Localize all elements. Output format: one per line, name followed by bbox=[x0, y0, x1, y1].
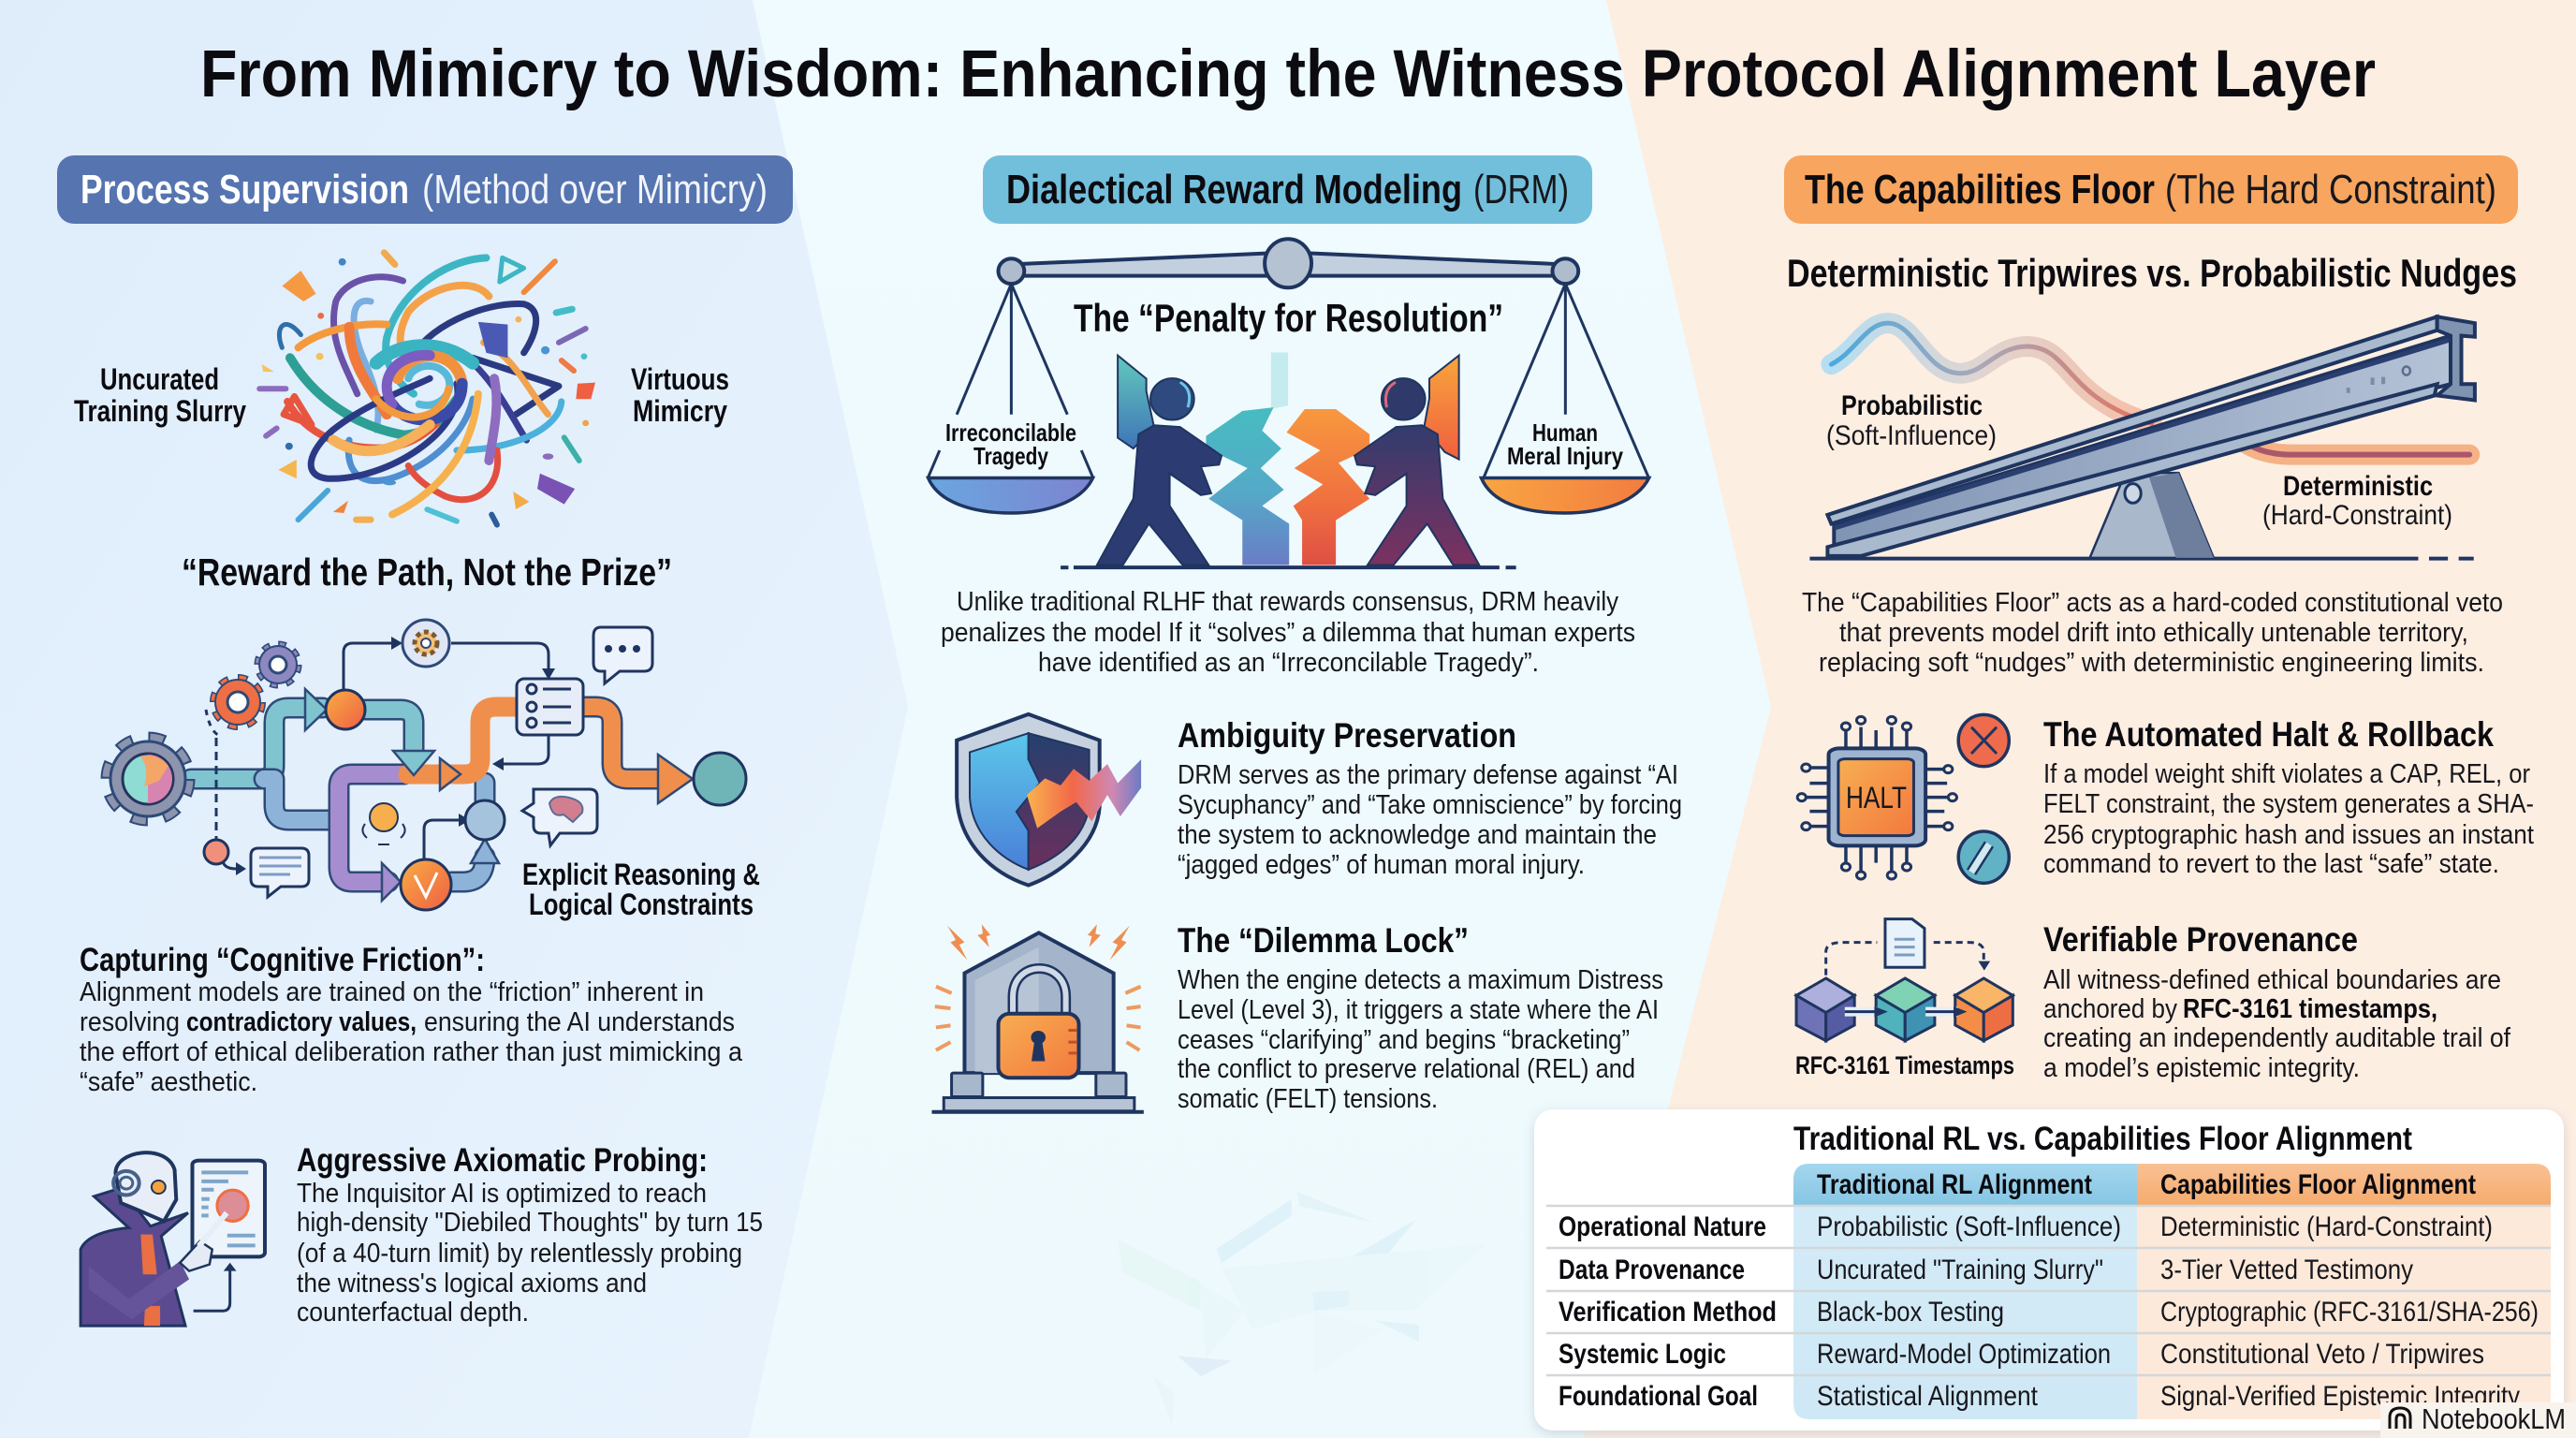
icon: dilemma lock bbox=[931, 924, 1144, 1112]
table row: operational nature: Deterministic (Hard-Constraint) bbox=[2160, 1211, 2493, 1242]
text block: penalty explanation: Unlike traditional RLHF that rewards consensus, DRM heavily bbox=[957, 587, 1618, 617]
icon: balance scale with broken figures bbox=[929, 239, 1649, 567]
label: irreconcilable tragedy bbox=[945, 418, 1076, 470]
text block: capturing cognitive friction: Capturing “Cognitive Friction”: bbox=[80, 942, 485, 978]
table header row: Capabilities Floor Alignment bbox=[2160, 1169, 2476, 1200]
table header row: Traditional RL Alignment bbox=[1817, 1169, 2092, 1200]
text block: dilemma lock: the conflict to preserve relational (REL) and bbox=[1178, 1054, 1635, 1084]
text block: verifiable provenance: anchored by bbox=[2043, 994, 2177, 1024]
table title: Traditional RL vs. Capabilities Floor Alignment bbox=[1793, 1121, 2412, 1157]
heading: process supervision: Process Supervision bbox=[80, 167, 409, 213]
label: uncurated training slurry bbox=[74, 362, 246, 428]
text block: automated halt and rollback: 256 cryptographic hash and issues an instant bbox=[2043, 820, 2534, 850]
text block: ambiguity preservation: DRM serves as the primary defense against “AI bbox=[1178, 760, 1678, 790]
heading: dialectical reward modeling: (DRM) bbox=[1473, 167, 1569, 213]
text block: dilemma lock bbox=[1178, 921, 1663, 1114]
table row: data provenance: Uncurated "Training Slurry" bbox=[1817, 1255, 2103, 1285]
table row: data provenance bbox=[1559, 1255, 2413, 1285]
text block: aggressive axiomatic probing bbox=[297, 1142, 763, 1328]
table header row bbox=[1817, 1169, 2476, 1200]
icon: main gear with split face bbox=[109, 740, 187, 818]
chart: process flow diagram bbox=[109, 620, 760, 921]
heading: process supervision bbox=[57, 155, 793, 224]
text block: verifiable provenance bbox=[2043, 920, 2511, 1083]
title: From Mimicry to Wisdom: Enhancing the Witness Protocol Alignment Layer bbox=[200, 37, 2376, 111]
label: rfc-3161 timestamps: RFC-3161 Timestamps bbox=[1795, 1051, 2014, 1079]
label: human moral injury: Meral Injury bbox=[1507, 442, 1623, 470]
text block: aggressive axiomatic probing: (of a 40-turn limit) by relentlessly probing bbox=[297, 1239, 742, 1269]
text block: verifiable provenance: Verifiable Provenance bbox=[2043, 920, 2358, 959]
table row: data provenance: Data Provenance bbox=[1559, 1255, 1745, 1285]
label: virtuous mimicry bbox=[631, 362, 729, 428]
text block: penalty explanation: penalizes the model If it “solves” a dilemma that human experts bbox=[941, 618, 1635, 648]
text block: verifiable provenance: RFC-3161 timestamps, bbox=[2183, 994, 2437, 1024]
text block: automated halt and rollback bbox=[2043, 715, 2534, 879]
label: deterministic: Deterministic bbox=[2283, 471, 2433, 502]
panel: process supervision bbox=[57, 155, 793, 1328]
table row: operational nature: Probabilistic (Soft-Influence) bbox=[1817, 1211, 2121, 1242]
heading: capabilities floor: (The Hard Constraint) bbox=[2165, 167, 2496, 213]
icon: robot inquisitor with tablet bbox=[80, 1152, 265, 1326]
panel: capabilities floor bbox=[1784, 155, 2534, 1083]
table column fills bbox=[1546, 1164, 2551, 1419]
text block: verifiable provenance: All witness-defined ethical boundaries are bbox=[2043, 965, 2501, 995]
panel: comparison table bbox=[1534, 1109, 2564, 1434]
text block: verifiable provenance: a model’s epistemic integrity. bbox=[2043, 1053, 2360, 1083]
text block: dilemma lock: ceases “clarifying” and begins “bracketing” bbox=[1178, 1025, 1630, 1055]
table row: verification method bbox=[1559, 1297, 2539, 1328]
text block: aggressive axiomatic probing: high-density "Diebiled Thoughts" by turn 15 bbox=[297, 1208, 763, 1238]
text block: ambiguity preservation bbox=[1178, 716, 1682, 880]
table row: operational nature bbox=[1559, 1211, 2493, 1242]
heading: capabilities floor: The Capabilities Floor bbox=[1805, 167, 2155, 213]
flow: arrowheads bbox=[305, 689, 693, 901]
table row: verification method: Black-box Testing bbox=[1817, 1297, 2004, 1328]
table row: systemic logic: Reward-Model Optimization bbox=[1817, 1339, 2111, 1370]
label: explicit reasoning bbox=[522, 858, 760, 921]
text block: capturing cognitive friction: contradictory values, bbox=[186, 1007, 417, 1037]
icon: halt chip with status badges bbox=[1797, 714, 2009, 883]
table row: foundational goal: Foundational Goal bbox=[1559, 1381, 1758, 1412]
table row: systemic logic: Systemic Logic bbox=[1559, 1339, 1726, 1370]
label: virtuous mimicry: Virtuous bbox=[631, 362, 729, 396]
label: uncurated training slurry: Training Slurry bbox=[74, 394, 246, 428]
table row: foundational goal bbox=[1559, 1381, 2520, 1412]
icon: tangled swirl of coloured strands bbox=[259, 253, 595, 525]
flow: thin connector lines bbox=[206, 643, 549, 869]
icon: idea bulb figure bbox=[362, 803, 405, 844]
label: probabilistic: (Soft-Influence) bbox=[1826, 420, 1997, 451]
text block: aggressive axiomatic probing: The Inquisitor AI is optimized to reach bbox=[297, 1179, 707, 1209]
table row: data provenance: 3-Tier Vetted Testimony bbox=[2160, 1255, 2413, 1285]
text block: dilemma lock: When the engine detects a maximum Distress bbox=[1178, 965, 1663, 995]
table row: operational nature: Operational Nature bbox=[1559, 1211, 1766, 1242]
label: probabilistic: Probabilistic bbox=[1841, 390, 1983, 421]
table row: foundational goal: Statistical Alignment bbox=[1817, 1381, 2039, 1412]
text block: capturing cognitive friction: the effort of ethical deliberation rather than just mimicking a bbox=[80, 1037, 743, 1067]
text block: verifiable provenance: creating an independently auditable trail of bbox=[2043, 1023, 2511, 1053]
flow: small arrow tips bbox=[236, 637, 555, 875]
label: deterministic bbox=[2262, 471, 2452, 531]
text block: ambiguity preservation: Sycuphancy” and “Take omniscience” by forcing bbox=[1178, 790, 1682, 820]
icon: purple gear bbox=[258, 645, 298, 684]
label: explicit reasoning: Explicit Reasoning & bbox=[522, 858, 760, 891]
text block: capturing cognitive friction: ensuring the AI understands bbox=[424, 1007, 735, 1037]
text block: dilemma lock: somatic (FELT) tensions. bbox=[1178, 1084, 1438, 1114]
heading: dialectical reward modeling: Dialectical Reward Modeling bbox=[1006, 167, 1462, 213]
table row: verification method: Verification Method bbox=[1559, 1297, 1777, 1328]
background: faint shattered shards watermark bbox=[1118, 1192, 1486, 1425]
table row: systemic logic: Constitutional Veto / Tripwires bbox=[2160, 1339, 2484, 1370]
label: human moral injury: Human bbox=[1532, 418, 1598, 447]
text block: automated halt and rollback: command to revert to the last “safe” state. bbox=[2043, 849, 2499, 879]
label: uncurated training slurry: Uncurated bbox=[100, 362, 219, 396]
text block: ambiguity preservation: Ambiguity Preservation bbox=[1178, 716, 1516, 755]
text block: capturing cognitive friction: resolving bbox=[80, 1007, 180, 1037]
text block: penalty explanation: have identified as an “Irreconcilable Tragedy”. bbox=[1038, 648, 1539, 678]
icon: checklist box bbox=[517, 679, 583, 735]
text block: dilemma lock: The “Dilemma Lock” bbox=[1178, 921, 1469, 960]
text block: capturing cognitive friction: Alignment models are trained on the “friction” inherent in bbox=[80, 977, 704, 1007]
text block: capabilities floor explanation: The “Capabilities Floor” acts as a hard-coded constitutional veto bbox=[1802, 588, 2503, 618]
label: deterministic: (Hard-Constraint) bbox=[2262, 500, 2452, 531]
heading: reward the path: “Reward the Path, Not the Prize” bbox=[182, 550, 672, 594]
text block: dilemma lock: Level (Level 3), it triggers a state where the AI bbox=[1178, 995, 1659, 1025]
table row: foundational goal: Signal-Verified Epistemic Integrity bbox=[2160, 1381, 2520, 1412]
icon: hash chain cubes with document bbox=[1796, 919, 2012, 1041]
icon: halt chip with status badges: HALT bbox=[1846, 781, 1907, 814]
text block: ambiguity preservation: “jagged edges” of human moral injury. bbox=[1178, 850, 1585, 880]
text block: aggressive axiomatic probing: the witness's logical axioms and bbox=[297, 1269, 647, 1299]
icon: steel beam seesaw with waves bbox=[1809, 316, 2475, 559]
text block: aggressive axiomatic probing: Aggressive Axiomatic Probing: bbox=[297, 1142, 708, 1179]
label: explicit reasoning: Logical Constraints bbox=[529, 888, 754, 921]
panel: dialectical reward modeling bbox=[929, 155, 1682, 1114]
label: virtuous mimicry: Mimicry bbox=[633, 394, 727, 428]
label: human moral injury bbox=[1507, 418, 1623, 470]
heading: capabilities floor bbox=[1784, 155, 2518, 224]
icon: light gear bbox=[402, 620, 449, 667]
text block: capabilities floor explanation: that prevents model drift into ethically untenable territory, bbox=[1839, 618, 2468, 648]
table row: systemic logic bbox=[1559, 1339, 2484, 1370]
heading: process supervision: (Method over Mimicry) bbox=[422, 167, 768, 213]
icon: orange gear bbox=[214, 679, 261, 726]
label: irreconcilable tragedy: Irreconcilable bbox=[945, 418, 1076, 447]
label: irreconcilable tragedy: Tragedy bbox=[973, 442, 1048, 470]
text block: capturing cognitive friction bbox=[80, 942, 743, 1097]
flow: nodes bbox=[204, 690, 746, 910]
text block: ambiguity preservation: the system to acknowledge and maintain the bbox=[1178, 820, 1657, 850]
icon: speech bubble with brain bbox=[522, 789, 597, 845]
text block: aggressive axiomatic probing: counterfactual depth. bbox=[297, 1298, 529, 1328]
icon: cracked shield bbox=[957, 714, 1141, 886]
text block: capturing cognitive friction: “safe” aesthetic. bbox=[80, 1067, 257, 1097]
text block: penalty explanation bbox=[941, 587, 1635, 678]
flow: pipes bbox=[191, 707, 665, 882]
heading: dialectical reward modeling bbox=[983, 155, 1592, 224]
heading: penalty for resolution: The “Penalty for Resolution” bbox=[1074, 296, 1503, 340]
icon: speech bubble with lines bbox=[251, 848, 309, 897]
label: probabilistic bbox=[1826, 390, 1997, 451]
text block: automated halt and rollback: The Automated Halt & Rollback bbox=[2043, 715, 2494, 754]
text block: capabilities floor explanation bbox=[1802, 588, 2503, 678]
text block: capabilities floor explanation: replacing soft “nudges” with deterministic engineering limits. bbox=[1819, 648, 2484, 678]
icon: speech bubble with dots bbox=[593, 627, 652, 683]
